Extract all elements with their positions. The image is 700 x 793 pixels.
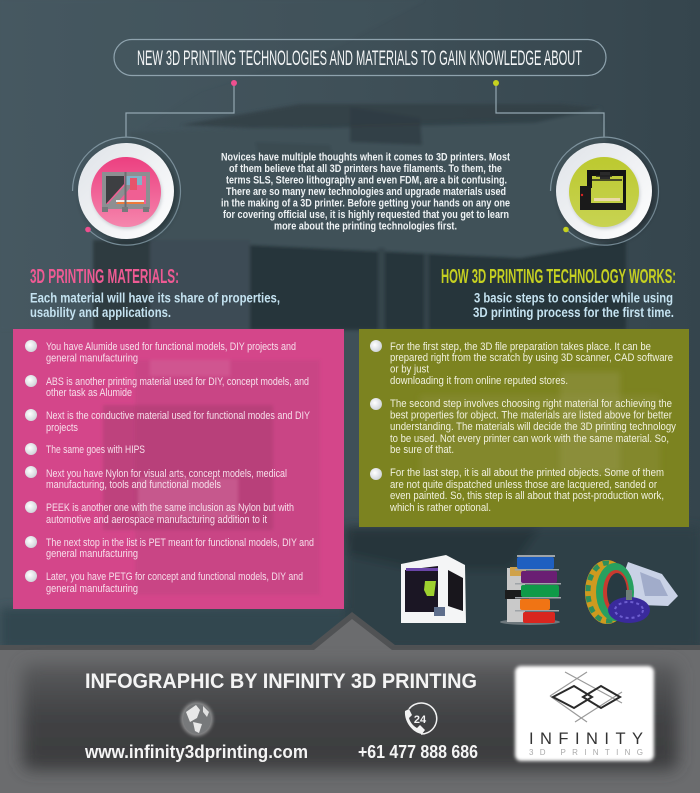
- intro paragraph: [221, 152, 510, 232]
- steps text: For the first step, the 3D file preparation takes place. It can be: [390, 341, 651, 353]
- icon: 24 hour phone: [405, 703, 437, 734]
- list text: ABS is another printing material used for DIY, concept models, and: [46, 376, 309, 388]
- icon: black frame 3D printer: [580, 170, 626, 210]
- logo: Infinity 3D Printing: INFINITY: [529, 730, 643, 748]
- title pill: [114, 40, 606, 76]
- footer phone: +61 477 888 686: [358, 742, 478, 762]
- steps text: downloading it from online reputed stores.: [390, 375, 568, 387]
- list text: You have Alumide used for functional models, DIY projects and: [46, 341, 296, 353]
- list text: [46, 341, 314, 595]
- list text: automotive and aerospace manufacturing addition to it: [46, 514, 268, 526]
- image: white 3D printer: [401, 555, 466, 623]
- left circle badge: printer icon: [72, 137, 180, 245]
- list text: projects: [46, 422, 78, 434]
- right connector: [493, 80, 604, 137]
- list text: PEEK is another one with the same inclusion as Nylon but with: [46, 502, 294, 514]
- image: 3D printed objects: [585, 560, 678, 624]
- bullets: [370, 340, 382, 480]
- right circle badge: printer icon: [550, 137, 658, 245]
- heading: 3D printing materials: usability and applications.: [30, 305, 171, 320]
- list text: Next is the conductive material used for functional modes and DIY: [46, 410, 310, 422]
- list text: Later, you have PETG for concept and functional models, DIY and: [46, 571, 303, 583]
- icon: 24 hour phone: 24: [414, 714, 427, 726]
- list text: The next stop in the list is PET meant for functional models, DIY and: [46, 537, 314, 549]
- list text: The same goes with HIPS: [46, 444, 145, 456]
- heading: 3D printing materials: 3D PRINTING MATERIALS:: [30, 266, 179, 288]
- steps text: or by just: [390, 364, 430, 376]
- image: filament spools: [500, 555, 561, 625]
- intro paragraph: Novices have multiple thoughts when it comes to 3D printers. Most: [221, 152, 510, 164]
- heading: 3D printing materials: Each material will have its share of properties,: [30, 290, 280, 306]
- list text: other task as Alumide: [46, 387, 132, 399]
- footer website: www.infinity3dprinting.com: [84, 742, 308, 762]
- icon: 3D printer in pink circle: [102, 172, 150, 212]
- panel: process steps: [359, 329, 689, 527]
- icon: globe: [181, 702, 213, 736]
- bullets: [25, 340, 37, 582]
- logo: Infinity 3D Printing: 3D PRINTING: [529, 748, 643, 757]
- steps text: be sure of that.: [390, 444, 454, 456]
- steps text: are not quite dispatched unless those are lacquered, sanded or: [390, 479, 657, 491]
- list text: general manufacturing: [46, 352, 138, 364]
- list text: general manufacturing: [46, 548, 138, 560]
- intro paragraph: in the making of a 3D printer. Before getting your hands on any one: [221, 198, 510, 210]
- logo: Infinity 3D Printing: [515, 666, 654, 761]
- intro paragraph: for covering official use, it is highly requested that you get to learn: [223, 209, 509, 221]
- list text: general manufacturing: [46, 583, 138, 595]
- panel: materials list: [13, 329, 344, 609]
- steps text: [389, 341, 676, 514]
- intro paragraph: terms SLS, Stereo lithography and even FDM, are a bit confusing.: [226, 174, 507, 186]
- left connector: [126, 80, 237, 137]
- intro paragraph: more about the printing technologies first.: [274, 220, 457, 232]
- footer heading: INFOGRAPHIC BY INFINITY 3D PRINTING: [85, 670, 477, 693]
- heading: how 3D printing technology works: [441, 266, 676, 320]
- intro paragraph: There are so many new technologies and upgrade materials used: [226, 186, 506, 198]
- list text: manufacturing, tools and functional models: [46, 479, 221, 491]
- heading: 3D printing materials: [30, 266, 280, 320]
- intro paragraph: of them believe that all 3D printers have filaments. To them, the: [229, 163, 502, 175]
- footer band: [0, 612, 700, 793]
- steps text: which is rather optional.: [389, 502, 491, 514]
- list text: Next you have Nylon for visual arts, concept models, medical: [46, 468, 287, 480]
